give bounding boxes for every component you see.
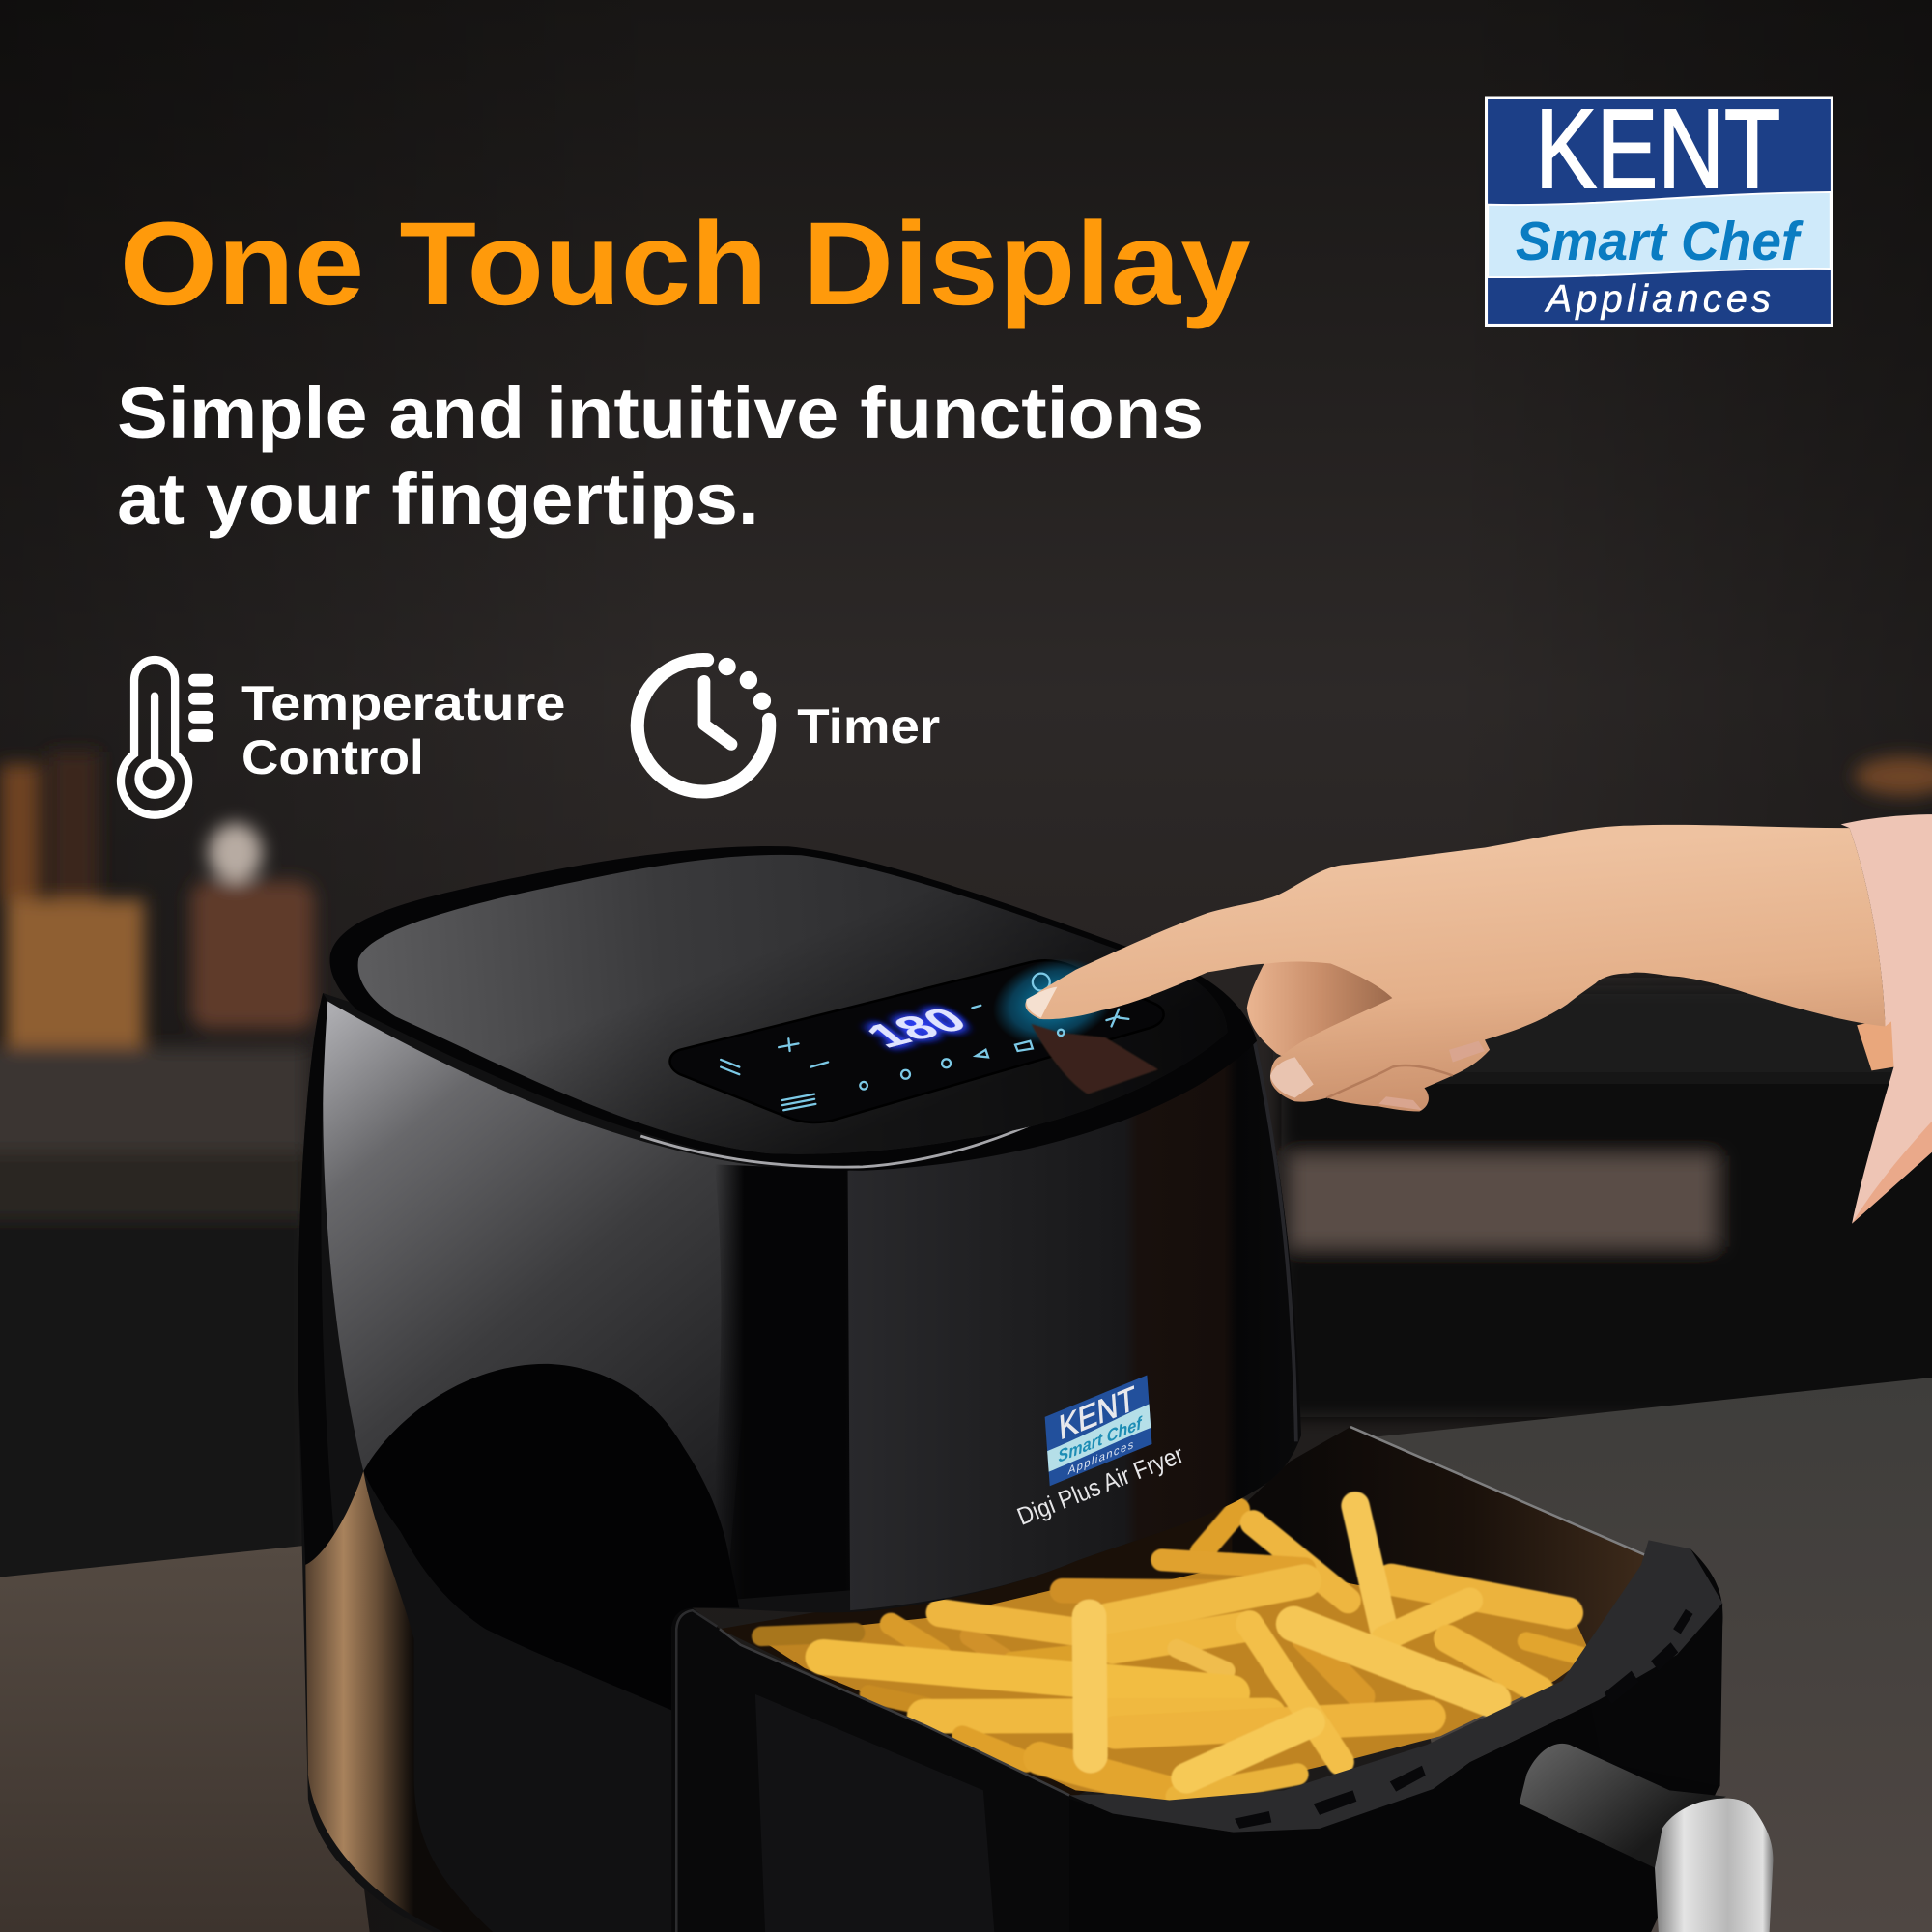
drawer inset panel bbox=[755, 1694, 994, 1932]
touch glow ring bbox=[983, 946, 1123, 1057]
basket rim vents bbox=[1235, 1609, 1693, 1829]
hand and sleeve bbox=[1025, 814, 1932, 1224]
subtitle: at your fingertips. bbox=[117, 459, 759, 539]
basket right outer wall bbox=[1589, 1548, 1722, 1786]
subtitle: Simple and intuitive functions bbox=[117, 373, 1204, 453]
fryer body bbox=[298, 993, 1301, 1932]
basket back wall bbox=[1109, 1427, 1651, 1688]
logo appliances: Appliances bbox=[1545, 278, 1771, 321]
countertop left bbox=[0, 1544, 370, 1932]
product logo on fryer: KENT bbox=[1058, 1378, 1137, 1447]
product logo on fryer: Appliances bbox=[1066, 1437, 1134, 1478]
panel icons bbox=[721, 974, 1128, 1110]
KENT logo bbox=[1487, 86, 1832, 325]
fries pile base bbox=[755, 1562, 1591, 1801]
finger nails bbox=[1378, 1041, 1485, 1110]
logo wordmark: KENT bbox=[1535, 86, 1780, 212]
countertop right bbox=[1355, 1378, 1932, 1932]
logo box bbox=[1487, 98, 1832, 325]
drawer front left panel bbox=[671, 1608, 1115, 1932]
back of hand and index finger bbox=[1025, 825, 1886, 1112]
blurred right shelf objects bbox=[1282, 756, 1932, 1417]
icon: clock bbox=[638, 658, 771, 792]
dark reflection blob bbox=[363, 1364, 739, 1710]
body edge streak near hand bbox=[1254, 1041, 1296, 1441]
control panel bbox=[670, 946, 1164, 1122]
lid rim bbox=[329, 846, 1257, 1171]
lid top surface bbox=[358, 855, 1227, 1154]
digital display 180: 180 bbox=[855, 1001, 980, 1055]
body left edge dark strip bbox=[298, 993, 335, 1567]
drawer left edge highlight bbox=[676, 1610, 717, 1932]
panel glass bbox=[670, 960, 1164, 1122]
drawer handle silver cap bbox=[1655, 1799, 1773, 1932]
air fryer bbox=[298, 846, 1773, 1932]
basket rim band bbox=[1069, 1540, 1722, 1833]
label: temperature control: Temperature bbox=[242, 676, 565, 730]
drawer handle grip bbox=[1520, 1744, 1726, 1868]
product name on fryer: Digi Plus Air Fryer bbox=[1013, 1441, 1188, 1531]
icon: thermometer bbox=[121, 660, 213, 815]
finger crease lines bbox=[1327, 1065, 1453, 1097]
curled back finger bbox=[1247, 954, 1400, 1056]
body vertical dark reflection band bbox=[702, 1164, 863, 1602]
finger reflection on panel bbox=[1032, 1024, 1158, 1094]
thumb nail bbox=[1270, 1057, 1314, 1097]
lid surface shading bbox=[358, 855, 1227, 1154]
drawer inner lip bbox=[720, 1629, 1069, 1795]
feature: timer bbox=[638, 658, 940, 792]
basket interior left bbox=[720, 1503, 1233, 1799]
lid rim highlight bbox=[640, 1118, 1047, 1167]
logo smart chef: Smart Chef bbox=[1516, 211, 1804, 271]
logo wave band bbox=[1488, 192, 1831, 277]
title: One Touch Display bbox=[120, 197, 1251, 329]
basket front wall bbox=[1069, 1603, 1722, 1932]
subtitle bbox=[117, 373, 1204, 539]
label: temperature control bbox=[242, 676, 565, 784]
french fries bbox=[761, 1506, 1586, 1797]
label: timer: Timer bbox=[797, 699, 940, 753]
product logo on fryer bbox=[1044, 1374, 1151, 1486]
sleeve lower inner edge bbox=[1852, 1122, 1932, 1224]
feature: temperature control bbox=[121, 660, 565, 815]
copper counter reflection bbox=[305, 1471, 493, 1932]
product logo on fryer: Smart Chef bbox=[1058, 1412, 1144, 1466]
sleeve bbox=[1841, 814, 1932, 1224]
label: temperature control: Control bbox=[242, 730, 424, 784]
index fingernail bbox=[1026, 987, 1057, 1018]
sleeve inner fold bbox=[1857, 1018, 1893, 1070]
blurred left shelf objects bbox=[0, 752, 314, 1589]
body front left gloss bbox=[323, 1001, 766, 1565]
body front right panel bbox=[848, 1035, 1301, 1610]
basket rim top edge bbox=[1350, 1427, 1645, 1555]
